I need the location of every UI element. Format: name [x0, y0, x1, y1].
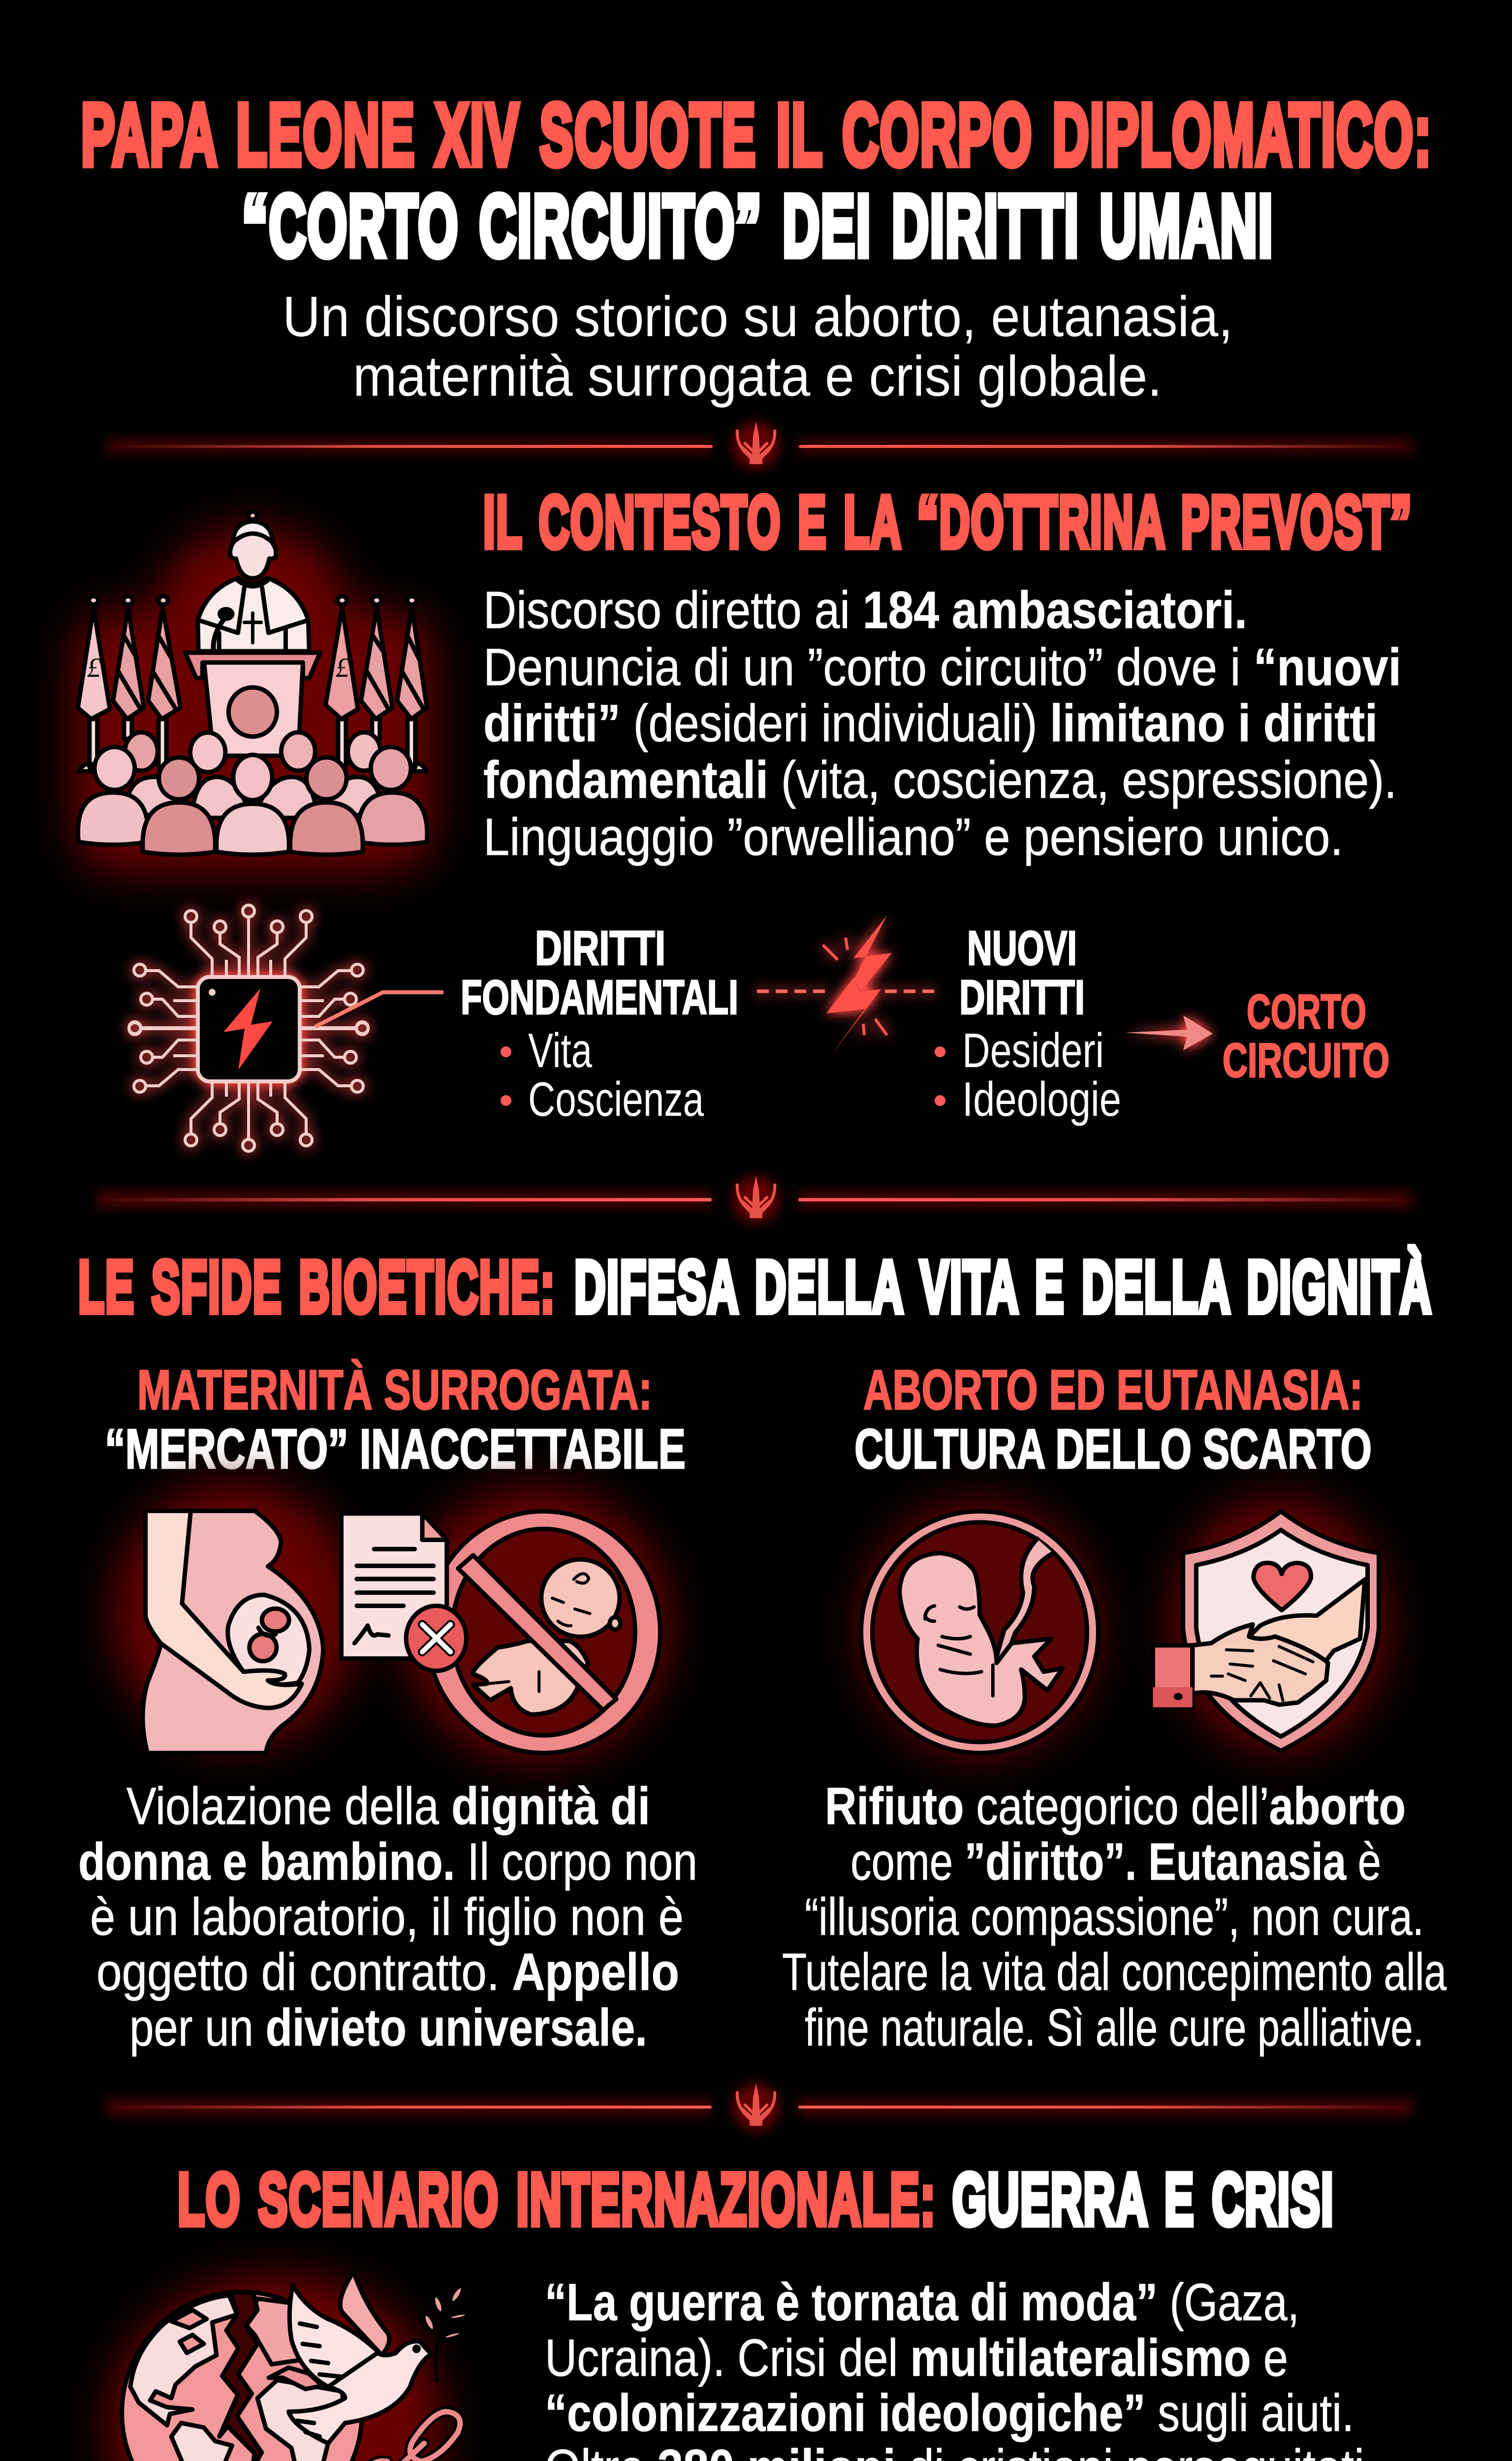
label: diritti fondamentali: Coscienza	[528, 1072, 704, 1126]
text block: surrogata: per un divieto universale.	[129, 1998, 647, 2057]
text block: scenario	[545, 2272, 1364, 2461]
text block: aborto ed eutanasia: come ”diritto”. Eutanasia è	[850, 1832, 1381, 1891]
icon: pope at podium with ambassadors	[74, 512, 433, 871]
text block: surrogata: donna e bambino. Il corpo non	[78, 1832, 697, 1891]
panel heading: aborto ed eutanasia	[854, 1359, 1372, 1481]
text block: contesto	[483, 580, 1401, 866]
label: nuovi diritti: NUOVI	[967, 921, 1077, 975]
title	[81, 86, 1432, 275]
panel heading: maternità surrogata: “MERCATO” INACCETTABILE	[105, 1418, 686, 1481]
label: corto circuito	[1223, 984, 1389, 1087]
text block: contesto: fondamentali (vita, coscienza, espressione).	[483, 750, 1397, 809]
text block: contesto: diritti” (desideri individuali) limitano i diritti	[483, 694, 1378, 753]
label: nuovi diritti: DIRITTI	[959, 970, 1085, 1024]
text block: surrogata	[78, 1776, 697, 2057]
section heading: sfide bioetiche	[78, 1245, 1432, 1328]
arrow	[1125, 1015, 1213, 1050]
text block: surrogata: è un laboratorio, il figlio non è	[90, 1887, 684, 1946]
text block: surrogata: oggetto di contratto. Appello	[96, 1942, 679, 2001]
label: nuovi diritti	[935, 921, 1121, 1126]
text block: aborto ed eutanasia: Rifiuto categorico dell’aborto	[825, 1776, 1406, 1835]
text block: contesto: Discorso diretto ai 184 ambasciatori.	[483, 580, 1247, 639]
divider 3	[106, 2083, 1413, 2131]
label: nuovi diritti: Desideri	[962, 1023, 1104, 1077]
label: corto circuito: CIRCUITO	[1223, 1033, 1389, 1087]
text block: surrogata: Violazione della dignità di	[126, 1776, 650, 1835]
subtitle: Un discorso storico su aborto, eutanasia,	[283, 284, 1233, 348]
divider 2	[96, 1176, 1413, 1223]
icon: chip lightning bolt	[223, 988, 273, 1070]
label: nuovi diritti: Ideologie	[962, 1072, 1121, 1126]
icon: fetus and protective shield	[861, 1496, 1388, 1757]
label: diritti fondamentali	[461, 921, 738, 1126]
icon: clash lightning with dashes	[757, 915, 940, 1055]
section heading: scenario internazionale: LO SCENARIO INTERNAZIONALE:	[178, 2158, 936, 2240]
subtitle	[283, 284, 1233, 408]
label: diritti fondamentali: Vita	[528, 1023, 592, 1077]
icon: broken globe, dove and chain	[108, 2272, 470, 2461]
label: diritti fondamentali: FONDAMENTALI	[461, 970, 738, 1024]
text block: contesto: Denuncia di un ”corto circuito” dove i “nuovi	[483, 637, 1401, 696]
connector: chip to label	[315, 992, 443, 1027]
label: corto circuito: CORTO	[1247, 984, 1366, 1039]
icon: circuit chip	[129, 905, 368, 1151]
divider 1	[106, 422, 1413, 469]
text block: scenario: Ucraina). Crisi del multilateralismo e	[545, 2328, 1288, 2387]
text block: contesto: Linguaggio ”orwelliano” e pensiero unico.	[483, 807, 1343, 866]
icon: pregnancy, contract, prohibited baby	[113, 1482, 669, 1762]
label: diritti fondamentali: DIRITTI	[535, 921, 665, 975]
section heading: sfide bioetiche: LE SFIDE BIOETICHE:	[78, 1245, 556, 1328]
subtitle: maternità surrogata e crisi globale.	[353, 344, 1162, 408]
icon: pope at podium with ambassadors: £	[87, 653, 101, 683]
text block: aborto ed eutanasia	[782, 1776, 1447, 2057]
panel heading: maternità surrogata	[105, 1359, 686, 1481]
text block: scenario: “colonizzazioni ideologiche” sugli aiuti.	[545, 2383, 1354, 2442]
icon: pope at podium with ambassadors: £	[336, 653, 350, 683]
text block: scenario: “La guerra è tornata di moda” (Gaza,	[545, 2272, 1299, 2332]
panel heading: maternità surrogata: MATERNITÀ SURROGATA:	[137, 1359, 652, 1421]
